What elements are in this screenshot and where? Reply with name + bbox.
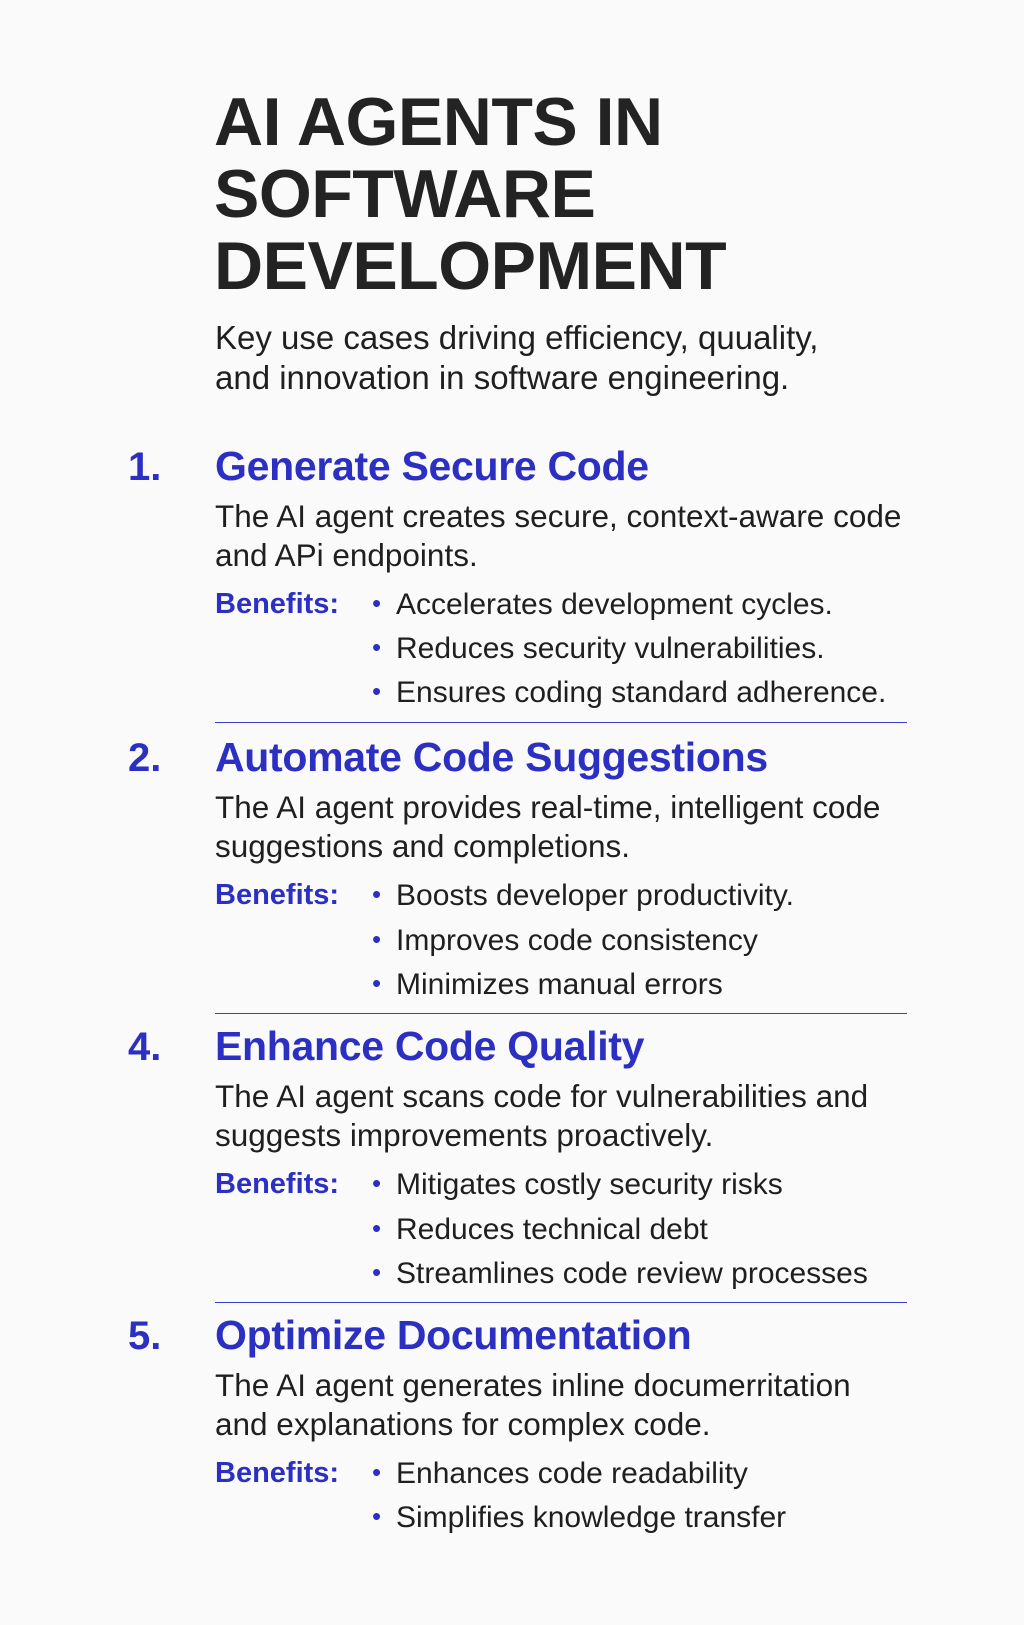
number 4: 4. [128,1025,161,1069]
benefits label 1: Benefits: [215,588,339,620]
benefits list 1: Ensures coding standard adherence. [396,676,886,709]
benefits list 5: • [372,1457,381,1487]
benefits list 5 [372,1457,786,1534]
title: SOFTWARE [214,156,595,232]
description 4 [215,1078,868,1153]
benefits list 5: Simplifies knowledge transfer [396,1501,786,1534]
description 2 [215,789,880,864]
benefits list 2: Improves code consistency [396,924,758,956]
description 1 [215,498,901,573]
benefits list 4: Streamlines code review processes [396,1257,868,1290]
heading 2: Automate Code Suggestions [215,734,768,780]
benefits list 4: • [372,1212,381,1242]
benefits list 2: • [372,968,381,998]
number 2: 2. [128,736,161,780]
description 5: and explanations for complex code. [215,1406,711,1442]
benefits list 1 [372,588,886,709]
title [214,84,726,304]
benefits list 4: Reduces technical debt [396,1212,708,1246]
benefits list 2 [372,879,794,1001]
description 2: suggestions and completions. [215,828,630,864]
section 4: enhance code quality [128,1023,907,1303]
benefits list 1: Accelerates development cycles. [396,588,833,621]
heading 1: Generate Secure Code [215,443,649,489]
section 2: automate code suggestions [128,734,907,1014]
benefits label 2: Benefits: [215,879,339,911]
benefits list 2: • [372,879,381,909]
benefits label 5: Benefits: [215,1457,339,1489]
benefits list 1: Reduces security vulnerabilities. [396,632,825,665]
benefits list 4: Mitigates costly security risks [396,1168,783,1201]
subtitle [215,319,818,396]
benefits list 2: Boosts developer productivity. [396,879,794,912]
description 4: The AI agent scans code for vulnerabilities and [215,1078,868,1114]
benefits list 2: Minimizes manual errors [396,968,723,1001]
subtitle: Key use cases driving efficiency, quuality, [215,319,818,356]
number 1: 1. [128,445,161,489]
benefits list 1: • [372,676,381,706]
benefits list 2: • [372,924,381,954]
benefits list 1: • [372,588,381,618]
benefits list 4: • [372,1168,381,1198]
benefits list 4 [372,1168,868,1290]
description 5: The AI agent generates inline documerritation [215,1367,851,1403]
title: AI AGENTS IN [214,84,663,160]
benefits label 4: Benefits: [215,1168,339,1200]
heading 5: Optimize Documentation [215,1312,691,1358]
subtitle: and innovation in software engineering. [215,359,789,396]
description 2: The AI agent provides real-time, intelligent code [215,789,880,825]
description 5 [215,1367,851,1442]
description 4: suggests improvements proactively. [215,1117,713,1153]
description 1: The AI agent creates secure, context-aware code [215,498,901,534]
section 1: generate secure code [128,443,907,723]
benefits list 5: • [372,1501,381,1531]
section 5: optimize documentation [128,1312,851,1534]
benefits list 1: • [372,632,381,662]
heading 4: Enhance Code Quality [215,1023,644,1069]
benefits list 5: Enhances code readability [396,1457,748,1490]
title: DEVELOPMENT [214,228,726,304]
number 5: 5. [128,1314,161,1358]
description 1: and APi endpoints. [215,537,478,573]
benefits list 4: • [372,1257,381,1287]
